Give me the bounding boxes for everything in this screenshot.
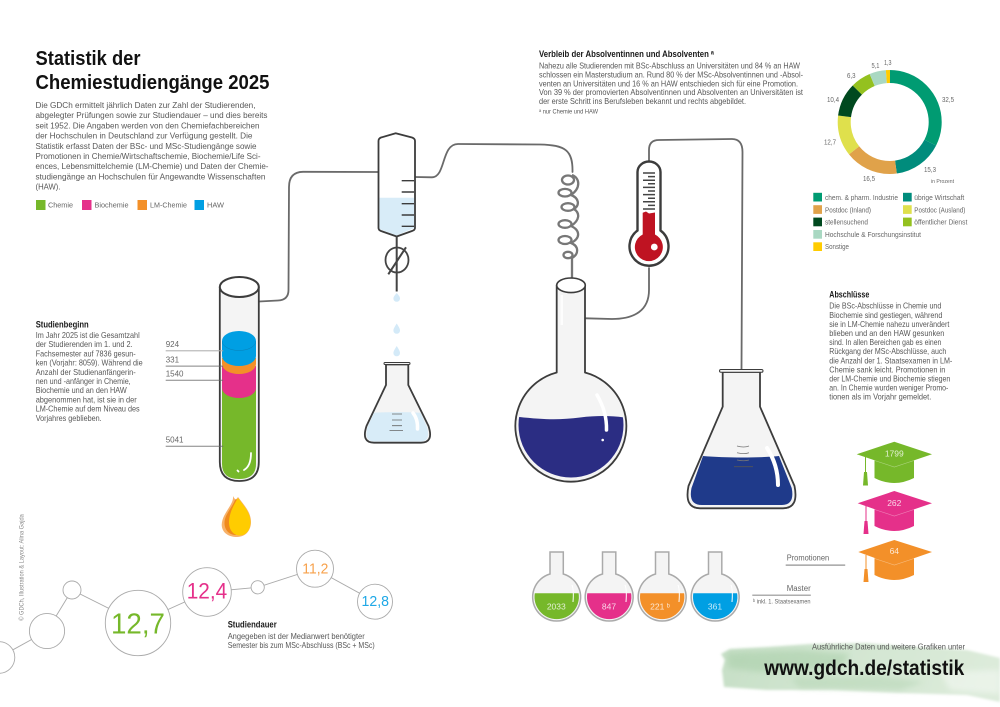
intro text [36,100,269,192]
erlenmeyer liquid [691,456,792,505]
donut values: 6,3 [847,71,856,80]
icon: graduation cap, Biochemie: 262 [887,498,902,508]
heading and text: Studiendauer: Semester bis zum MSc-Abschluss (BSc + MSc) [228,641,375,650]
burette [378,133,415,292]
heading and text: Studiendauer: Studiendauer [228,620,277,630]
small flask: HAW: 361 [708,601,722,611]
round flask liquid [518,416,624,478]
donut values: 10,4 [827,95,839,104]
test tube values: 331 [166,356,180,365]
round flask rim [557,278,585,293]
legend: subjects [36,200,224,210]
thermometer scale [643,173,655,209]
heading and text: Abschlüsse: Abschlüsse [829,290,869,300]
test tube [220,277,259,481]
round flask highlight [597,395,607,430]
donut legend: Postdoc (Inland) [825,205,871,214]
donut values: 5,1 [872,61,880,70]
test tube values [166,340,223,447]
icon: graduation cap, Chemie: 1799 [885,448,904,458]
heading and text: Verbleib: Von 39 % der promovierten Absolventinnen und Absolventen an Universitäten ist [539,88,804,97]
erlenmeyer highlight [767,448,778,485]
intro text: (HAW). [36,182,60,192]
copyright: © GDCh, Illustration & Layout: Alina Gajda [18,514,26,621]
donut chart [844,76,935,168]
small flask: Biochemie [585,552,633,621]
icon: thermometer [630,162,668,266]
heading and text: Studienbeginn: Vorjahres geblieben. [36,414,102,423]
burette stem and valve [396,236,398,292]
burette scale [402,181,414,226]
large round flask [515,278,628,482]
call to action: Ausführliche Daten und weitere Grafiken unter [812,642,965,652]
donut legend: stellensuchend [825,218,868,227]
large erlenmeyer flask [688,370,795,508]
connecting tubes [259,139,742,370]
label: Master [752,584,811,606]
liquid layers [222,331,256,480]
donut legend: Postdoc (Ausland) [914,205,965,214]
heading and text: Studienbeginn: Biochemie und an den HAW [36,386,127,395]
intro text: seit 1952. Die Angaben werden von den Chemiefachbereichen [36,120,260,130]
heading and text: Abschlüsse: blieben und an den HAW gesunken [829,329,945,338]
heading and text: Abschlüsse [829,290,953,402]
donut values: 1,3 [884,58,892,67]
title: Statistik der [36,48,141,70]
legend: subjects: Biochemie [94,200,128,210]
icon: coil [558,175,578,278]
donut values [824,58,954,185]
icon: graduation cap, LM-Chemie [858,540,932,582]
label: Master: Master [787,584,811,593]
small erlenmeyer flask [365,362,430,443]
molecule chart: Studiendauer: 12,4 [187,578,227,604]
title: Chemiestudiengänge 2025 [36,72,270,94]
heading and text: Studienbeginn: LM-Chemie auf dem Niveau des [36,405,140,414]
label: Promotionen: Promotionen [787,554,829,563]
donut legend: Sonstige [825,242,849,251]
small flask: LM-Chemie [638,552,686,621]
legend: subjects: LM-Chemie [150,200,187,210]
heading and text: Studiendauer [228,620,375,650]
icon: graduation cap, Chemie [857,442,932,486]
label: Master: ᵇ inkl. 1. Staatsexamen [753,598,811,606]
heading and text: Studienbeginn: abgenommen hat, ist sie in der [36,395,137,404]
call to action: www.gdch.de/statistik [763,657,965,680]
heading and text: Verbleib: ᵃ nur Chemie und HAW [539,110,598,116]
heading and text: Abschlüsse: Chemie sank leicht. Promotionen in [829,365,946,374]
heading and text: Verbleib: Verbleib der Absolventinnen und Absolventen ᵃ [539,49,714,59]
erlenmeyer marks [737,446,749,461]
intro text: ences, Lebensmittelchemie (LM-Chemie) und Daten der Chemie- [36,161,269,171]
donut legend: Hochschule & Forschungsinstitut [825,230,921,239]
donut legend: übrige Wirtschaft [914,193,964,202]
heading and text: Abschlüsse: Die BSc-Abschlüsse in Chemie und [829,302,942,311]
intro text: Die GDCh ermittelt jährlich Daten zur Zahl der Studierenden, [36,100,256,110]
heading and text: Verbleib: venten an Universitäten und 16 % an HAW entschieden sich für eine Promotion. [539,79,798,88]
intro text: abgelegter Prüfungen sowie zur Studiendauer – und dies bereits [36,110,268,120]
test tube values: 924 [166,340,180,349]
heading and text: Abschlüsse: Biochemie sind gestiegen, während [829,311,943,320]
heading and text: Studienbeginn [36,319,143,423]
intro text: Statistik erfasst Daten der BSc- und MSc-Studiengänge sowie [36,141,257,151]
heading and text: Verbleib: schlossen ein Masterstudium an. Rund 80 % der MSc-Absolventinnen und -Absol- [539,70,803,79]
molecule chart: Studiendauer [0,550,392,673]
tube highlight [238,453,251,472]
heading and text: Abschlüsse: die Anzahl der 1. Staatsexamen in LM- [829,356,953,365]
heading and text: Studiendauer: Angegeben ist der Medianwert benötigter [228,632,365,641]
heading and text: Abschlüsse: tionen als im Vorjahr gemeldet. [829,393,931,402]
heading and text: Studienbeginn: Im Jahr 2025 ist die Gesamtzahl [36,331,140,340]
mercury [635,212,663,261]
test tube values: 1540 [166,370,184,379]
donut values: 16,5 [863,174,875,183]
heading and text: Abschlüsse: Rückgang der MSc-Abschlüsse, auch [829,347,947,356]
icon: graduation cap, LM-Chemie: 64 [890,546,899,556]
legend: subjects: Chemie [48,200,73,210]
call to action [763,642,965,680]
heading and text: Abschlüsse: an. In Chemie wurden weniger Promo- [829,384,949,393]
donut values: in Prozent [931,179,954,185]
heading and text: Studienbeginn: nen und -anfänger in Chemie, [36,377,131,386]
heading and text: Verbleib [539,49,804,116]
heading and text: Abschlüsse: der LM-Chemie und Biochemie stiegen [829,374,951,384]
donut legend: öffentlicher Dienst [914,218,967,227]
donut legend [813,193,967,251]
heading and text: Verbleib: Nahezu alle Studierenden mit BSc-Abschluss an Universitäten und 84 % an HAW [539,62,800,70]
small flask: Chemie [533,552,581,621]
molecule chart: Studiendauer: 12,7 [111,608,165,640]
heading and text: Studienbeginn: der Studierenden im 1. und 2. [36,340,133,349]
heading and text: Studienbeginn: Anzahl der Studienanfängerin- [36,368,136,377]
heading and text: Verbleib: der erste Schritt ins Berufsleben bekannt und rechts abgebildet. [539,97,746,106]
brush stroke background [721,643,1000,702]
intro text: der Hochschulen in Deutschland zur Verfügung gestellt. Die [36,131,253,141]
burette liquid [380,198,414,236]
donut values: 12,7 [824,138,836,146]
donut values: 32,5 [942,95,954,104]
small flask: LM-Chemie: 221 ᵇ [650,601,670,611]
donut values: 15,3 [924,165,936,174]
molecule chart: Studiendauer: 11,2 [302,561,328,577]
heading and text: Studienbeginn: ken (Vorjahr: 8059). Während die [36,359,143,368]
small flask liquid [366,412,428,442]
test tube values: 5041 [166,436,184,445]
small flask: Biochemie: 847 [602,601,616,611]
title [36,48,270,94]
donut legend: chem. & pharm. Industrie [825,193,898,202]
icon: graduation cap, Biochemie [858,491,932,534]
small flask: HAW [691,552,739,621]
heading and text: Abschlüsse: sie in LM-Chemie nahezu unverändert [829,320,950,329]
legend: subjects: HAW [207,200,224,210]
heading and text: Studienbeginn: Studienbeginn [36,319,89,329]
icon: flame [222,496,251,537]
label: Promotionen [786,554,845,566]
intro text: studiengänge an Hochschulen für Angewandte Wissenschaften [36,171,266,181]
heading and text: Studienbeginn: Fachsemester auf 7836 gesun- [36,349,136,358]
drops [393,293,400,356]
intro text: Promotionen in Chemie/Wirtschaftschemie, Biochemie/Life Sci- [36,151,261,161]
small flask: Chemie: 2033 [547,601,566,611]
tube rim [220,277,259,297]
heading and text: Abschlüsse: sind. In allen Bereichen gab es einen [829,338,942,347]
molecule chart: Studiendauer: 12,8 [362,593,389,610]
